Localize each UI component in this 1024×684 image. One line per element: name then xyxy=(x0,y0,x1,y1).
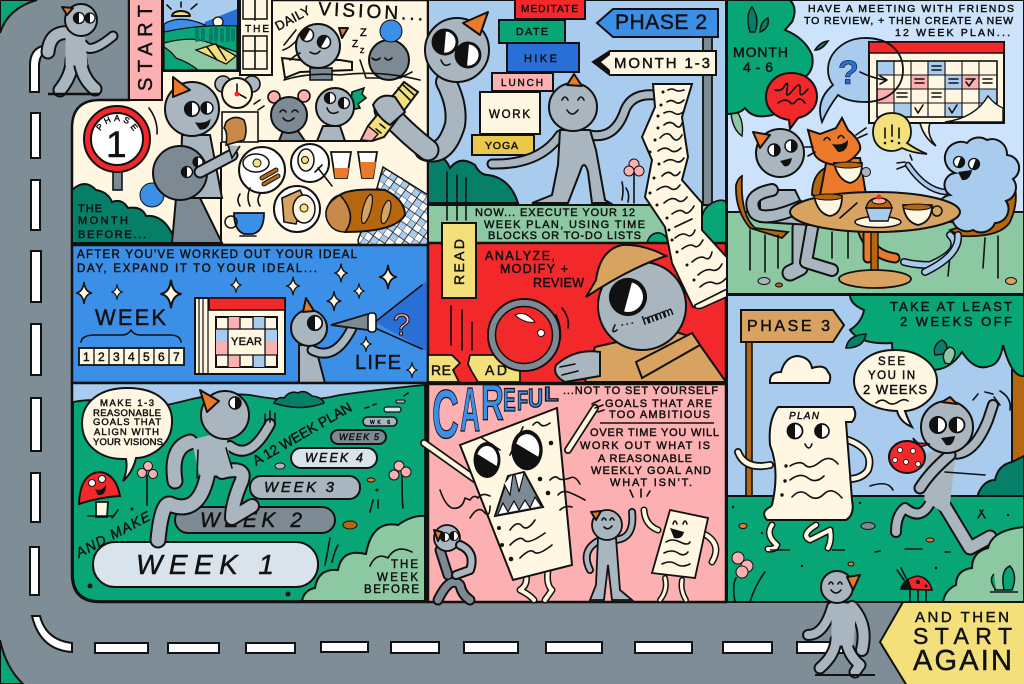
speech bubble: red xyxy=(766,73,817,129)
landscape picture xyxy=(163,0,238,71)
mushroom xyxy=(79,472,120,518)
text: not too ambitious xyxy=(563,385,718,423)
text: analyze modify review: REVIEW xyxy=(533,276,584,290)
sign: phase 3: PHASE 3 xyxy=(747,318,830,335)
text: over time: A REASONABLE xyxy=(598,453,692,465)
sign: and then start again xyxy=(880,602,1024,684)
flower xyxy=(622,159,644,203)
detective coat xyxy=(585,330,726,382)
block: yoga: YOGA xyxy=(485,140,518,152)
table xyxy=(790,192,960,288)
window: THE xyxy=(245,24,269,35)
year calendar xyxy=(195,298,285,374)
stepping stone: week 3 xyxy=(250,476,360,499)
character: high five xyxy=(587,510,632,600)
character: walker at start xyxy=(48,4,113,94)
broken sign: re ad xyxy=(428,355,520,382)
heading: daily vision: DAILY xyxy=(272,2,313,34)
sign: phase 1: E xyxy=(129,122,140,133)
tree trunk xyxy=(1012,370,1024,465)
stepping stone: week 2: WEEK 2 xyxy=(200,509,302,532)
broken sign: re ad: AD xyxy=(485,362,507,378)
checked cloth xyxy=(358,167,428,262)
mint strip: execute text: NOW... EXECUTE YOUR 12 xyxy=(475,207,635,219)
character: big grey holding pencil xyxy=(361,12,489,152)
week: 1 xyxy=(83,350,90,364)
heading: careful xyxy=(432,374,559,453)
tree with month label xyxy=(727,0,828,136)
text: analyze modify review xyxy=(485,249,584,290)
broken sign: re ad: RE xyxy=(431,362,451,378)
stepping stone: week 3: WEEK 3 xyxy=(264,479,335,496)
speech bubble: goals: MAKE 1-3 xyxy=(100,398,154,409)
character with flashlight looking at life xyxy=(291,280,428,383)
text: take at least 2 weeks off: TAKE AT LEAST xyxy=(890,299,1012,314)
character: holding blocks and scroll xyxy=(492,74,655,203)
sleeping characters in bed xyxy=(282,20,420,80)
text: over time xyxy=(580,427,719,497)
heading: careful: R xyxy=(481,374,504,431)
text: take at least 2 weeks off: 2 WEEKS OFF xyxy=(900,314,1012,329)
window xyxy=(240,0,272,75)
heading: careful: L xyxy=(544,383,559,406)
block: meditate xyxy=(515,0,585,19)
intro text xyxy=(77,249,358,275)
week: 6 xyxy=(158,350,165,364)
sign: read xyxy=(442,172,476,350)
speech bubble: see you in 2 weeks: YOU IN xyxy=(868,370,915,382)
block: lunch: LUNCH xyxy=(501,78,543,89)
block: date xyxy=(499,20,565,43)
tree with month label: 4-6 xyxy=(743,59,773,75)
text: take at least 2 weeks off xyxy=(890,299,1012,329)
label: start: START xyxy=(135,5,157,91)
week xyxy=(79,305,184,365)
heading: careful: E xyxy=(503,382,516,418)
sign post xyxy=(703,37,712,205)
teacups xyxy=(814,162,942,225)
character: plan scroll: PLAN xyxy=(789,411,820,422)
panel: twelve week plan stepping stones xyxy=(72,383,426,602)
text: have a meeting: 12 WEEK PLAN... xyxy=(895,27,1010,39)
sign: phase 1 xyxy=(84,106,157,190)
bush label: the month before xyxy=(72,184,176,243)
sign: phase 1: 1 xyxy=(106,124,127,165)
panel: phase 2 execute sky xyxy=(428,0,726,205)
panel: the daily vision cream background xyxy=(72,0,428,245)
character: plan scroll xyxy=(738,407,869,549)
text: not too ambitious: GOALS THAT ARE xyxy=(605,398,712,410)
week: WEEK xyxy=(95,305,166,330)
block: hike: HIKE xyxy=(524,53,557,65)
block: meditate: MEDITATE xyxy=(521,4,578,15)
character eating toast xyxy=(165,77,246,198)
week: 7 xyxy=(173,350,180,364)
intro text: DAY, EXPAND IT TO YOUR IDEAL... xyxy=(77,263,317,275)
pebbles xyxy=(758,278,1016,287)
stacked time blocks xyxy=(472,0,585,155)
sleeping characters in bed: Z xyxy=(360,27,367,39)
legs of angry paper xyxy=(520,570,552,600)
speech bubble: goals: GOALS THAT xyxy=(93,417,161,428)
life label: LIFE xyxy=(355,352,401,374)
bush mint xyxy=(943,527,1024,602)
speech bubble: see you in 2 weeks: 2 WEEKS xyxy=(863,382,927,397)
panel: analyze, modify and review xyxy=(428,172,726,383)
panel: phase 3 take time off xyxy=(727,295,1024,602)
character: scared xyxy=(434,525,472,600)
text: analyze modify review: ANALYZE, xyxy=(485,249,555,263)
speech bubble: goals: ALIGN WITH xyxy=(94,427,159,438)
sign: read: READ xyxy=(451,239,467,285)
text: not too ambitious: TOO AMBITIOUS xyxy=(609,409,710,421)
text: over time: WEEKLY GOAL AND xyxy=(591,465,711,477)
sign: and then start again: START xyxy=(913,623,1012,649)
block: yoga xyxy=(472,135,534,155)
chairs xyxy=(736,168,1016,278)
coat collar xyxy=(636,333,700,378)
block: date: DATE xyxy=(516,26,548,38)
sign: and then start again: AGAIN xyxy=(913,645,1012,677)
week: 4 xyxy=(128,350,135,364)
bush label: the week before: BEFORE xyxy=(364,584,419,596)
magnifying glass xyxy=(488,299,600,382)
character: traveller with bundle xyxy=(889,391,1010,548)
character: blue cloud xyxy=(897,137,1019,272)
bush label: the month before: MONTH xyxy=(78,215,128,227)
heading: careful: C xyxy=(432,376,459,453)
text: over time: OVER TIME YOU WILL xyxy=(590,427,719,439)
sign: phase 2 xyxy=(597,9,718,37)
cloud xyxy=(770,356,830,383)
sign: phase 1: S xyxy=(122,115,132,126)
tree with month label: MONTH xyxy=(733,44,788,60)
heading: daily vision xyxy=(272,0,424,34)
breakfast plates, drinks and coffee xyxy=(225,144,377,236)
week: 5 xyxy=(143,350,150,364)
year calendar: YEAR xyxy=(231,336,262,348)
bush label: the month before: BEFORE... xyxy=(78,229,146,241)
arms of angry paper xyxy=(424,400,604,480)
table line and shelf xyxy=(221,141,368,244)
stepping stone: week 4: WEEK 4 xyxy=(305,451,363,465)
tree xyxy=(846,295,1024,378)
text: over time: WORK OUT WHAT IS xyxy=(580,440,710,452)
intro text: AFTER YOU'VE WORKED OUT YOUR IDEAL xyxy=(77,249,358,261)
road lane markings xyxy=(30,46,843,653)
angry paper xyxy=(440,408,585,580)
stepping stone: week 2 xyxy=(175,507,335,533)
road text: and make a 12 week plan: AND MAKE xyxy=(72,508,153,561)
panel: expand to ideal week year life xyxy=(72,245,428,383)
speech bubble: see you in 2 weeks xyxy=(854,350,937,427)
pebbles and grass xyxy=(88,463,378,596)
detective character: hmmm xyxy=(640,304,675,328)
detective hat xyxy=(586,245,666,297)
flower xyxy=(732,552,765,602)
ground details xyxy=(732,484,1009,569)
heading: careful: F xyxy=(517,386,528,417)
character with flashlight looking at life: ? xyxy=(393,307,410,342)
block: hike xyxy=(507,43,579,72)
text: have a meeting: TO REVIEW, + THEN CREATE A NEW xyxy=(804,15,1013,27)
mouse and sprout characters xyxy=(268,88,366,141)
cupcake xyxy=(866,194,892,221)
heading: careful: A xyxy=(460,376,480,445)
speech bubble: question mark: ? xyxy=(838,54,859,92)
small happy paper xyxy=(644,510,716,600)
week: 3 xyxy=(113,350,120,364)
text: over time: WHAT ISN'T. xyxy=(610,477,692,489)
bush dark xyxy=(978,456,1024,496)
ladybug xyxy=(897,568,932,601)
bush label: the week before: WEEK xyxy=(377,572,418,584)
sleeping characters in bed: Z xyxy=(360,48,365,55)
road text: and make a 12 week plan: A 12 WEEK PLAN xyxy=(250,399,354,469)
stepping stone: week 4 xyxy=(291,448,377,468)
speech bubble: goals: YOUR VISIONS xyxy=(93,437,163,448)
text: have a meeting xyxy=(804,3,1014,39)
character: dark grey with blue ball xyxy=(140,145,240,243)
bush label: the week before xyxy=(302,516,425,601)
stepping stone: week 1: WEEK 1 xyxy=(136,549,274,580)
heading: careful: U xyxy=(528,384,543,413)
character: grey friend xyxy=(752,129,832,273)
speech bubble: question mark xyxy=(838,38,903,102)
alarm clock on shelf xyxy=(215,76,264,142)
stars xyxy=(76,264,418,378)
speech bubble: goals: REASONABLE xyxy=(93,408,161,419)
stepping stones: later weeks xyxy=(363,393,408,426)
panel: month 4-6 meeting xyxy=(727,0,1024,294)
mint strip: execute text: WEEK PLAN, USING TIME xyxy=(484,219,645,231)
sign: phase 2: PHASE 2 xyxy=(615,11,707,34)
block: lunch xyxy=(492,73,553,91)
speech bubble: see you in 2 weeks: SEE xyxy=(878,356,905,368)
block: work xyxy=(480,92,540,134)
calendar xyxy=(869,42,1004,146)
sign: and then start again: AND THEN xyxy=(915,609,1009,626)
sign: phase 1: H xyxy=(102,114,112,126)
stepping stones: later weeks: WK 6 xyxy=(370,420,390,426)
sign: month 1-3: MONTH 1-3 xyxy=(614,55,710,72)
stepping stone: week 5: WEEK 5 xyxy=(339,432,380,442)
flowers xyxy=(138,461,411,508)
road text: and make a 12 week plan xyxy=(72,399,354,561)
bread loaf xyxy=(326,190,405,232)
detective character xyxy=(598,262,686,350)
bush xyxy=(428,156,518,203)
character: cat xyxy=(805,118,895,258)
mint strip: execute text: BLOCKS OR TO-DO LISTS xyxy=(488,230,641,242)
block: work: WORK xyxy=(489,109,530,121)
bush label: the month before: THE xyxy=(78,203,102,215)
text: not too ambitious: ...NOT TO SET YOURSELF xyxy=(563,385,718,397)
sleeping characters in bed: Z xyxy=(352,39,358,50)
stepping stone: week 1 xyxy=(93,542,318,587)
text: have a meeting: HAVE A MEETING WITH FRIENDS xyxy=(808,3,1014,15)
scroll: to-do list xyxy=(642,84,746,309)
sign: month 1-3 xyxy=(593,51,716,75)
character: walking on road xyxy=(808,571,875,675)
stepping stone: week 5 xyxy=(331,430,386,444)
speech bubble fill: question xyxy=(820,38,903,122)
panel: careful xyxy=(424,374,726,602)
speech bubble: yellow xyxy=(873,113,927,154)
week: 2 xyxy=(98,350,105,364)
sign: phase 1: A xyxy=(114,113,120,123)
mint strip: execute text xyxy=(428,200,726,243)
text: analyze modify review: MODIFY + xyxy=(500,262,568,276)
sign: phase 3 xyxy=(741,310,844,496)
character: running xyxy=(158,390,275,540)
label: start xyxy=(129,0,162,100)
sign: phase 1: P xyxy=(94,121,106,132)
speech bubble: goals xyxy=(82,388,172,481)
bush label: the week before: THE xyxy=(391,559,418,571)
